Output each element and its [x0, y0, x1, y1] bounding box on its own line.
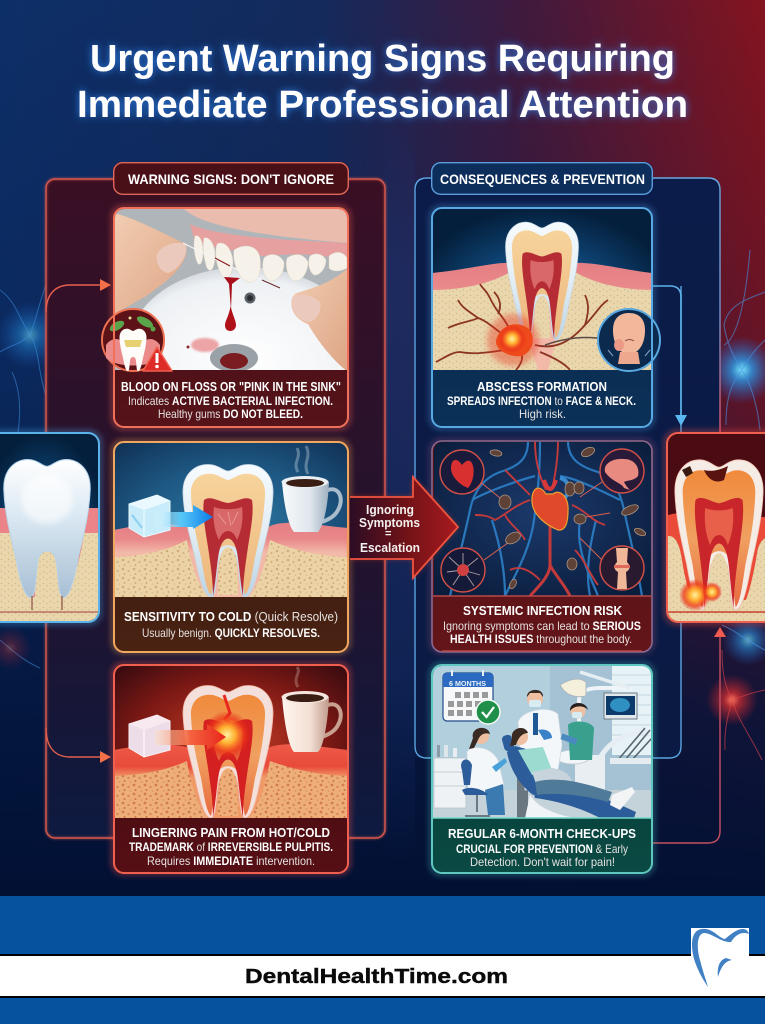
caption: blood on floss: Healthy gums DO NOT BLEED.: [158, 407, 303, 421]
card: blood on floss: [102, 207, 360, 428]
illustration: dental clinic: [432, 665, 652, 820]
caption: sensitivity to cold: [124, 609, 338, 640]
caption: abscess formation: High risk.: [519, 407, 566, 421]
header: consequences and prevention: [431, 162, 653, 195]
arrow: ignoring symptoms equals escalation: Escalation: [360, 541, 420, 555]
icon: cell inset: [441, 548, 485, 592]
caption: blood on floss: Indicates ACTIVE BACTERIAL INFECTION.: [128, 394, 333, 408]
footer: bottom blue band: [0, 998, 765, 1024]
neural network decoration left: [0, 285, 64, 670]
caption: abscess formation: ABSCESS FORMATION: [477, 379, 607, 394]
title: Immediate Professional Attention: [77, 84, 688, 126]
arrow: to blood on floss card: [46, 279, 111, 312]
caption: sensitivity to cold: Usually benign. QUICKLY RESOLVES.: [142, 626, 320, 640]
icon: ice cube inflamed: [129, 715, 170, 757]
card: regular check-ups: [431, 664, 653, 874]
icon: heart inset: [440, 450, 484, 494]
panel: healthy tooth: [0, 432, 100, 623]
caption: lingering pain: [129, 825, 333, 868]
panel: warning signs frame: [46, 179, 385, 838]
arrow: hot and cold to pulp: [155, 724, 226, 750]
caption: regular check-ups: Detection. Don't wait for pain!: [470, 855, 615, 869]
caption: regular check-ups: CRUCIAL FOR PREVENTION & Early: [456, 842, 628, 856]
icon: knee joint inset: [600, 546, 644, 590]
caption: sensitivity to cold: SENSITIVITY TO COLD (Quick Resolve): [124, 609, 338, 624]
arrow: check-ups up to tooth: [714, 627, 726, 637]
icon: calendar: [443, 670, 493, 721]
icon: brain inset: [600, 449, 644, 493]
icon: calendar: 6 MONTHS: [449, 679, 486, 688]
footer: top blue band: [0, 896, 765, 954]
arrow: cold to pulp: [155, 505, 213, 529]
arrow: abscess to decayed tooth: [653, 286, 687, 426]
icon: coffee cup hot: [282, 667, 341, 752]
icon: bacteria on tooth badge: [102, 309, 164, 371]
header: consequences and prevention: CONSEQUENCES & PREVENTION: [440, 171, 645, 187]
header: warning signs: [113, 162, 349, 195]
caption: regular check-ups: [448, 826, 636, 869]
caption: abscess formation: [447, 379, 636, 421]
caption: systemic infection risk: HEALTH ISSUES throughout the body.: [450, 632, 632, 646]
illustration: body circulation: [432, 441, 652, 597]
arrow: ignoring symptoms equals escalation: Ignoring: [366, 503, 414, 517]
caption: lingering pain: LINGERING PAIN FROM HOT/COLD: [132, 825, 330, 840]
illustration: flossing over sink: [115, 209, 347, 370]
caption: lingering pain: Requires IMMEDIATE intervention.: [147, 854, 315, 868]
panel: decayed tooth: [666, 432, 765, 623]
caption: blood on floss: [121, 379, 341, 421]
caption: systemic infection risk: Ignoring symptoms can lead to SERIOUS: [443, 619, 641, 633]
illustration: inflamed tooth: [114, 665, 348, 819]
arrow: ignoring symptoms equals escalation: [350, 477, 458, 578]
footer: website banner: [0, 954, 765, 998]
icon: central heart: [532, 478, 568, 530]
card: lingering pain: [113, 664, 349, 873]
arrow: to lingering pain card: [46, 728, 111, 763]
card: systemic infection risk: [431, 440, 653, 652]
title: Urgent Warning Signs Requiring: [90, 38, 675, 80]
illustration: abscess at root: [432, 208, 652, 370]
icon: coffee cup: [282, 446, 341, 532]
icon: warning triangle: [143, 347, 172, 371]
caption: lingering pain: TRADEMARK of IRREVERSIBLE PULPITIS.: [129, 840, 333, 854]
illustration: healthy tooth with cold stimulus: [114, 442, 348, 598]
footer: website banner: DentalHealthTime.com: [245, 966, 508, 988]
arrow: ignoring symptoms equals escalation: Symptoms: [359, 516, 420, 530]
panel: consequences frame: [415, 178, 720, 843]
arrow: ignoring symptoms equals escalation: =: [385, 528, 391, 540]
caption: regular check-ups: REGULAR 6-MONTH CHECK-UPS: [448, 826, 636, 841]
caption: abscess formation: SPREADS INFECTION to FACE & NECK.: [447, 394, 636, 408]
caption: blood on floss: BLOOD ON FLOSS OR "PINK IN THE SINK": [121, 379, 341, 394]
neural network decoration right: [706, 250, 765, 760]
card: sensitivity to cold: [113, 441, 349, 652]
icon: swollen face: [598, 309, 660, 371]
icon: green check: [476, 700, 500, 724]
header: warning signs: WARNING SIGNS: DON'T IGNORE: [128, 171, 334, 187]
caption: systemic infection risk: [443, 603, 641, 646]
icon: dental logo: [691, 928, 749, 987]
icon: ice cube: [129, 495, 170, 537]
card: abscess formation: [431, 207, 660, 428]
caption: systemic infection risk: SYSTEMIC INFECTION RISK: [463, 603, 623, 618]
title: [77, 38, 688, 126]
